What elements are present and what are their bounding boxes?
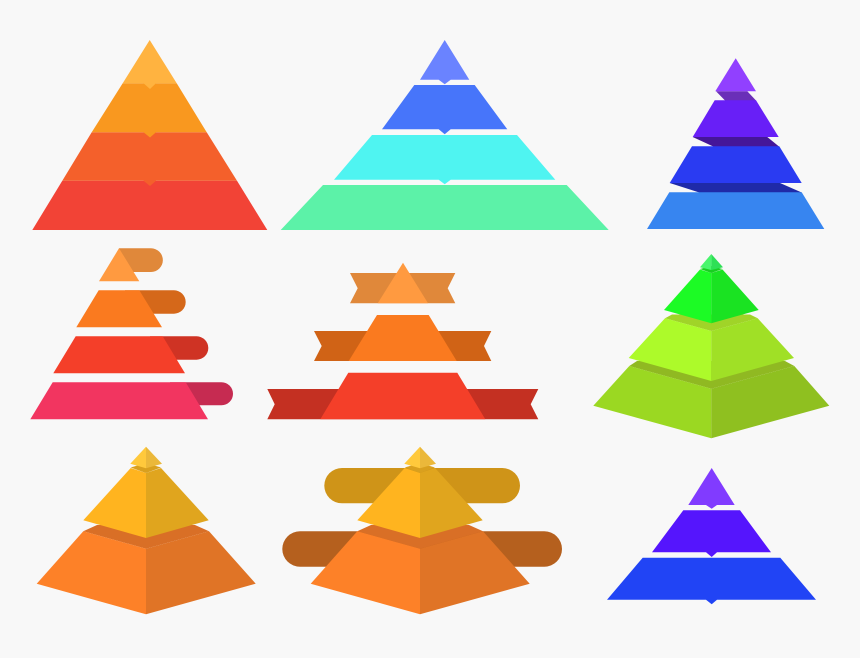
ribbon 1 [350,273,455,303]
tier 1 purple [688,468,735,509]
bottom tier shadow [357,525,483,549]
middle tier right face [420,468,483,538]
middle tier right face [146,468,209,538]
tier 2 [349,315,457,361]
tier 3 orange red [62,132,237,186]
tier 4 sky blue [647,192,824,229]
tab 2 [125,290,186,314]
pyramid 2: blue cyan green separated [281,40,609,230]
tier 2 blue [382,85,507,134]
pyramid 7: orange 3D [37,447,256,614]
cap shadow [700,266,722,273]
tier 4 red [32,181,267,230]
ribbon 2 [314,331,491,361]
tier 2 [76,290,162,327]
tier 2 orange [92,83,207,138]
middle tier shadow [131,463,161,473]
tab 4 [170,382,233,405]
shadow under tier 3 [670,183,802,192]
bottom tier left face [311,531,420,614]
pyramid 8: orange 3D with bars [282,447,562,614]
tier 4 [30,382,208,419]
pyramid 6: green 3D [593,254,829,438]
tier 1 periwinkle [420,40,469,84]
middle tier left face [357,468,420,538]
middle tier shadow [665,314,758,331]
ribbon 3 [267,389,538,419]
cap left face [130,447,146,468]
top tier left face [664,270,711,323]
upper bar [324,468,520,503]
pyramid 9: violet blue separated [607,468,816,604]
cap right face [146,447,162,468]
pyramid 5: with ribbons [267,263,538,419]
bottom tier right face [711,366,829,438]
tier 3 blue [607,558,816,604]
tier 3 royal blue [670,146,802,183]
tier 3 [320,373,485,419]
pyramid 3: purple blue with shadows [647,58,824,229]
tier 1 [99,248,139,281]
cap right face [711,254,723,270]
tier 3 [53,336,185,373]
shadow under tier 2 [693,137,779,146]
cap left face [404,447,420,468]
tier 2 violet [693,100,779,137]
cap right face [420,447,436,468]
cap left face [700,254,711,270]
bottom tier left face [593,366,711,438]
middle tier left face [83,468,146,538]
tab 1 [119,248,163,272]
tier 3 cyan [334,135,555,184]
bottom tier right face [146,531,256,614]
bottom tier left face [37,531,146,614]
bottom tier right face [420,531,530,614]
pyramid 1: warm stacked flat [32,40,267,230]
bottom tier shadow [629,361,794,389]
tier 1 light purple [715,58,756,91]
tier 2 indigo [652,510,771,557]
bottom tier shadow [83,525,209,549]
top tier right face [711,270,759,323]
middle tier right face [711,318,794,381]
middle tier shadow [405,463,435,473]
lower bar [282,531,562,567]
tier 1 light orange [123,40,177,89]
tier 1 [378,263,428,303]
pyramid 4: with right-side tabs [30,248,233,419]
shadow under tier 1 [716,91,756,100]
tier 4 mint [281,185,609,230]
tab 3 [150,336,208,360]
middle tier left face [629,318,711,381]
